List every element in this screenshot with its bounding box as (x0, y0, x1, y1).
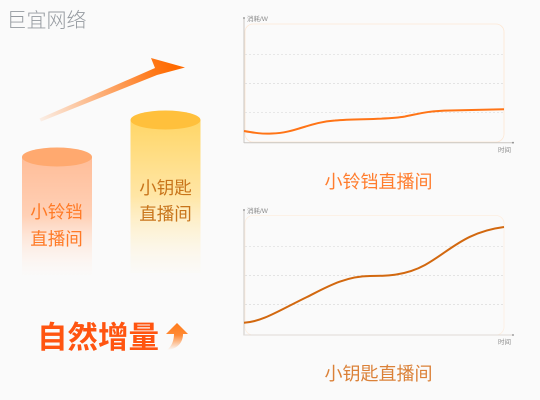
cylinder label line: small bell room: 直播间 (30, 229, 83, 249)
cylinder label line: small key room: 直播间 (139, 204, 192, 224)
line series (244, 109, 504, 134)
trend arrow (40, 58, 185, 122)
logo text: 巨宜网络 (6, 9, 86, 32)
x axis label: 时间 (498, 145, 511, 154)
y axis label: 消耗/W (247, 206, 269, 215)
cylinder label: small key: 小钥匙 (139, 178, 192, 198)
cylinder: small bell (22, 148, 92, 275)
line series (244, 227, 504, 323)
headline: natural growth: 自然增量 (37, 321, 159, 355)
x axis label: 时间 (498, 337, 511, 346)
chart: small bell room (243, 14, 514, 154)
y axis label: 消耗/W (247, 14, 269, 23)
chart: small key room (243, 206, 514, 346)
cylinder: small key (130, 110, 200, 273)
cylinder label: small bell: 小铃铛 (30, 202, 83, 222)
chart title: small bell room: 小铃铛直播间 (324, 172, 432, 192)
chart title: small key room: 小钥匙直播间 (324, 364, 432, 384)
icon: up arrow (166, 323, 188, 350)
